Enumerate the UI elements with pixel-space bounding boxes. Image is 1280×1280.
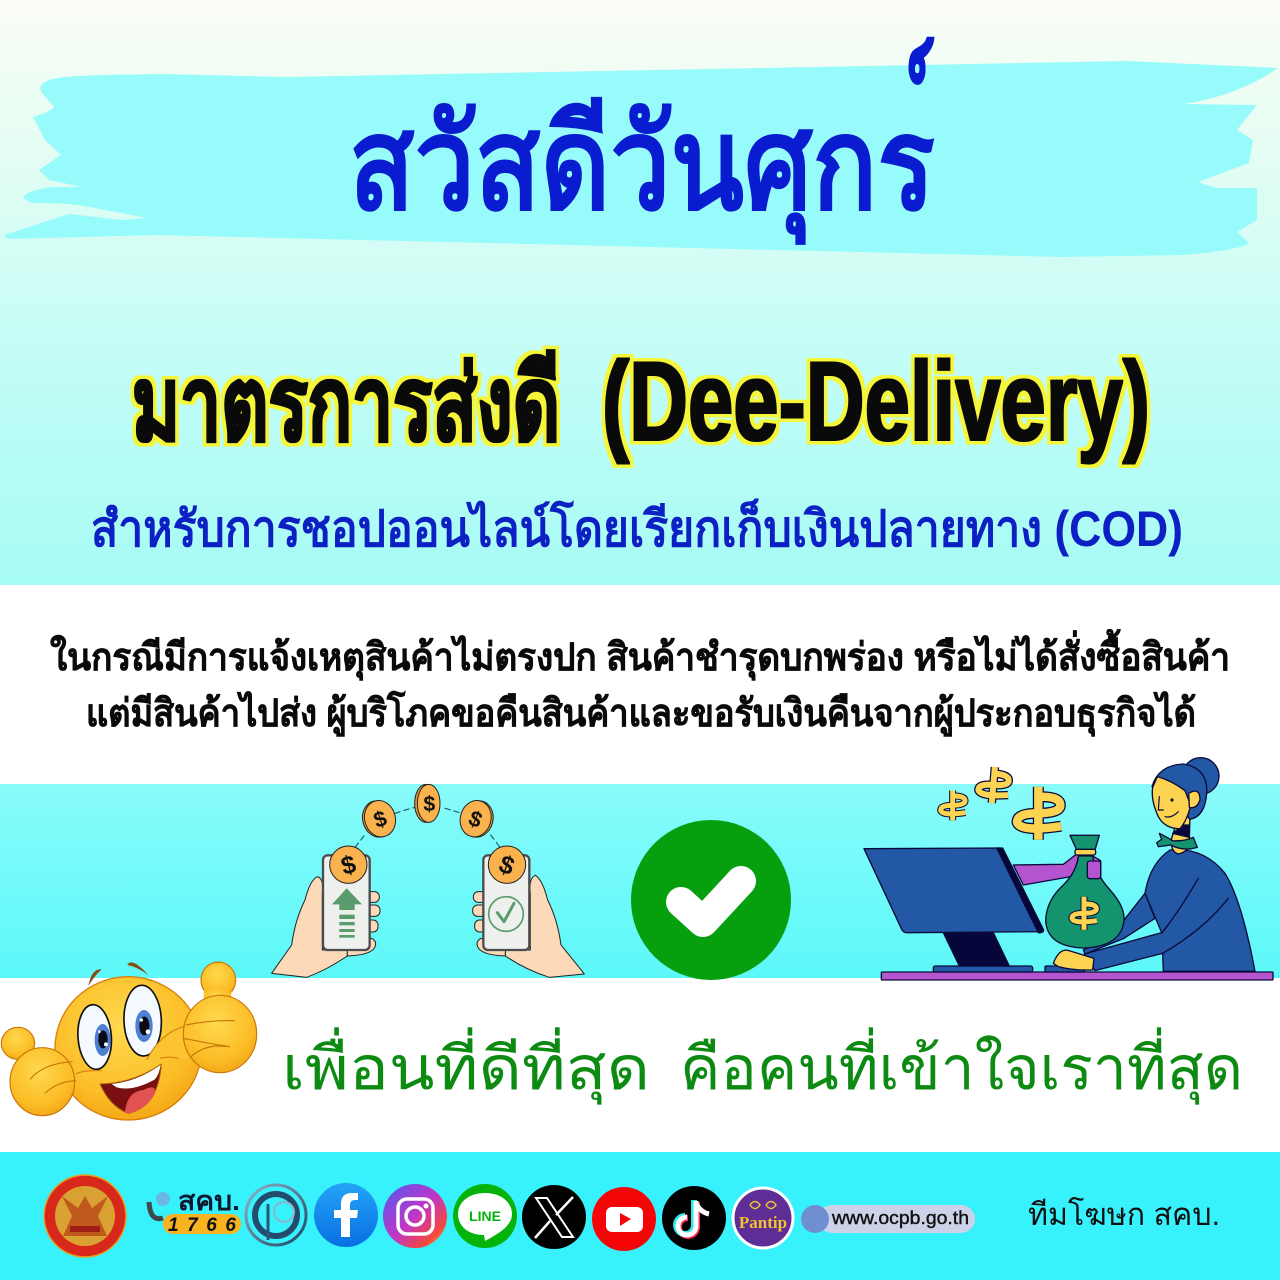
mouth bbox=[100, 1064, 161, 1113]
left thumb hand bbox=[1, 1027, 76, 1116]
website pill: www.ocpb.go.th bbox=[831, 1208, 969, 1228]
left phone coin: $ bbox=[338, 850, 359, 881]
body text bbox=[50, 629, 1230, 737]
title bbox=[349, 37, 935, 246]
icon: hotline 1766: สคบ. bbox=[178, 1186, 240, 1216]
baht sign large bbox=[1017, 787, 1061, 840]
money bag bbox=[1046, 835, 1124, 948]
scarf bbox=[1157, 833, 1197, 849]
woman neck bbox=[1171, 815, 1190, 854]
woman far arm bbox=[1083, 893, 1155, 954]
ear bbox=[1189, 791, 1200, 808]
monitor stand bbox=[943, 933, 1009, 966]
icon: LINE: LINE bbox=[469, 1208, 501, 1224]
subtitle: Dee-Delivery bbox=[132, 339, 1150, 464]
hair bbox=[1152, 764, 1207, 819]
icon: X bbox=[522, 1185, 586, 1249]
icon: thumbs up emoji bbox=[1, 962, 257, 1120]
hair bun bbox=[1182, 758, 1219, 794]
left hand bbox=[272, 877, 380, 977]
flying coin 1 bbox=[358, 797, 400, 841]
icon: instagram bbox=[383, 1184, 447, 1248]
desk bbox=[881, 966, 1273, 980]
seller arm bbox=[1013, 854, 1101, 885]
flying coin 3 bbox=[456, 797, 497, 841]
icon: green check circle bbox=[631, 820, 791, 980]
icon: YouTube bbox=[592, 1187, 656, 1251]
illustration: woman shopping online with money bag bbox=[864, 758, 1273, 980]
baht sign small bbox=[941, 790, 965, 820]
right phone check mark bbox=[489, 897, 523, 931]
left phone bbox=[323, 855, 370, 950]
eyebrows bbox=[88, 962, 148, 986]
flying coin 2 bbox=[415, 784, 440, 822]
icon: Pantip: Pantip bbox=[739, 1213, 787, 1232]
baht sign on bag bbox=[1072, 897, 1097, 930]
right thumb hand bbox=[183, 962, 257, 1073]
dashed coin arc bbox=[355, 807, 500, 847]
baht sign medium bbox=[977, 766, 1010, 804]
brush stroke behind title bbox=[4, 61, 1278, 257]
icon: TikTok bbox=[662, 1186, 726, 1250]
quote text: คือคนที่เข้าใจเราที่สุด bbox=[680, 1027, 1243, 1105]
right phone coin bbox=[488, 846, 526, 883]
title: สวัสดีวันศุกร bbox=[349, 91, 935, 246]
icon: OCPB logo bbox=[246, 1185, 306, 1245]
cheeks bbox=[76, 1026, 188, 1080]
panel: aqua illustration band bbox=[0, 784, 1280, 978]
left phone upload arrow bbox=[332, 888, 362, 938]
icon: Pantip bbox=[733, 1188, 793, 1248]
icon: facebook bbox=[314, 1183, 378, 1247]
face bbox=[55, 977, 202, 1120]
cheek lines bbox=[76, 1026, 185, 1074]
icon: LINE bbox=[453, 1184, 517, 1248]
left eye bbox=[76, 1004, 114, 1070]
monitor bbox=[864, 848, 1044, 933]
quote text bbox=[282, 1027, 1243, 1105]
right hand bbox=[473, 875, 584, 977]
icon: agency seal bbox=[44, 1175, 126, 1257]
right phone coin: $ bbox=[495, 850, 518, 881]
illustration: phones transferring coins bbox=[272, 784, 584, 977]
flying coin 2: $ bbox=[423, 792, 435, 816]
footer icon row bbox=[44, 1175, 975, 1257]
quote text: เพื่อนที่ดีที่สุด bbox=[282, 1027, 650, 1105]
woman body and near arm bbox=[1084, 850, 1255, 971]
left phone coin bbox=[330, 846, 367, 883]
icon: hotline 1766 bbox=[149, 1186, 241, 1236]
body text: แต่มีสินค้าไปส่ง ผู้บริโภคขอคืนสินค้าและขอรับเงินคืนจากผู้ประกอบธุรกิจได้ bbox=[86, 690, 1196, 737]
right eye bbox=[123, 985, 163, 1057]
panel: header gradient background bbox=[0, 0, 1280, 585]
right phone bbox=[483, 855, 529, 950]
icon: hotline 1766: 1766 bbox=[168, 1215, 236, 1236]
panel: white explanation band bbox=[0, 585, 1280, 784]
sub-heading: COD: สำหรับการชอปออนไลน์โดยเรียกเก็บเงินปลายทาง (COD) bbox=[91, 498, 1183, 557]
subtitle: Dee-Delivery: มาตรการส่งดี bbox=[132, 347, 560, 463]
panel: white quote band bbox=[0, 978, 1280, 1152]
title: ์ bbox=[908, 37, 935, 85]
facial features bbox=[1158, 797, 1178, 817]
flying coin 3: $ bbox=[465, 805, 486, 833]
footer credit: ทีมโฆษก สคบ. bbox=[1028, 1197, 1220, 1232]
woman hand bbox=[1053, 950, 1094, 970]
website pill bbox=[801, 1205, 975, 1233]
panel: footer band bbox=[0, 1152, 1280, 1280]
woman face bbox=[1152, 777, 1191, 829]
flying coin 1: $ bbox=[370, 805, 390, 833]
